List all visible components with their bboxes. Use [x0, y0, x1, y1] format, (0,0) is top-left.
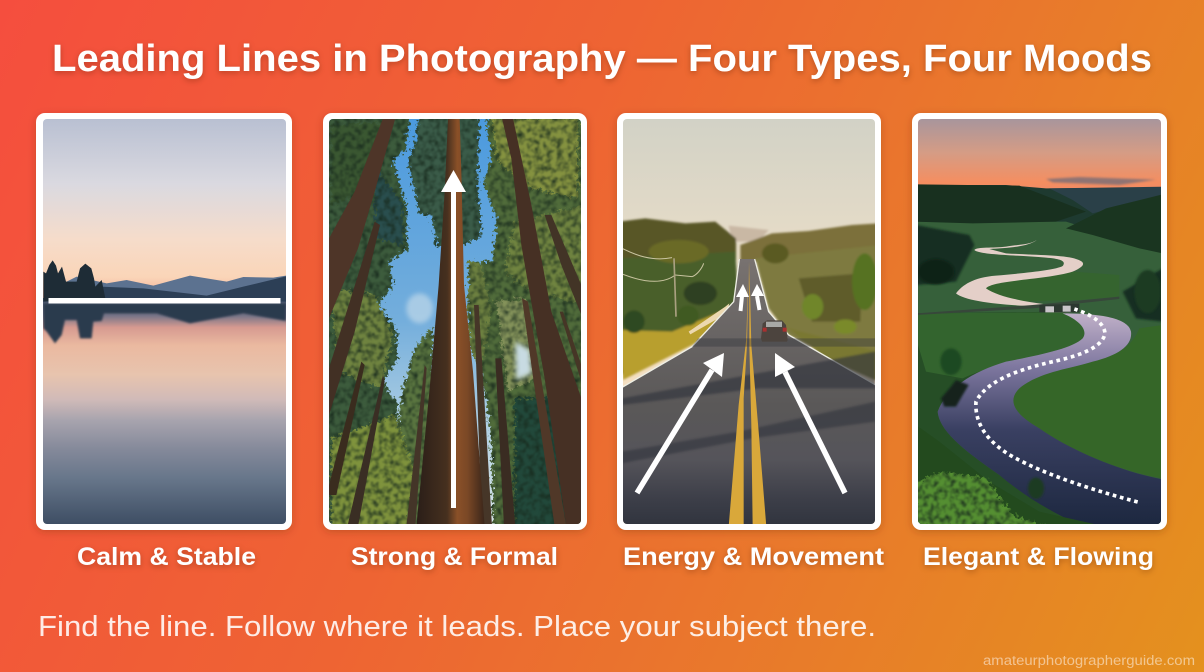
photo: winding river valley — [916, 119, 1163, 527]
card frame — [323, 113, 587, 530]
panel: energy and movement converging lines — [617, 113, 881, 530]
label: energy and movement: Energy & Movement — [623, 543, 885, 571]
card frame — [912, 113, 1167, 530]
line overlay: horizontal — [48, 298, 280, 304]
label: calm and stable: Calm & Stable — [77, 543, 256, 571]
line overlay: converging arrows — [637, 284, 845, 493]
card frame — [36, 113, 292, 530]
title: Leading Lines in Photography — Four Types, Four Moods — [52, 38, 1152, 80]
panel: strong and formal vertical line — [323, 113, 587, 530]
photo: tall pine trees — [325, 115, 585, 530]
label: strong and formal: Strong & Formal — [351, 543, 558, 571]
tagline: Find the line. Follow where it leads. Place your subject there. — [38, 611, 876, 643]
card frame — [617, 113, 881, 530]
photo: country road — [619, 119, 879, 527]
line overlay: vertical arrow — [441, 170, 466, 508]
panel: elegant and flowing s-curve — [912, 113, 1167, 530]
label: elegant and flowing: Elegant & Flowing — [923, 543, 1154, 571]
line overlay: dotted s-curve — [976, 309, 1138, 502]
source credit: amateurphotographerguide.com — [983, 653, 1195, 668]
panel: calm and stable horizontal line — [36, 113, 292, 530]
photo: lake at dusk — [43, 119, 286, 524]
